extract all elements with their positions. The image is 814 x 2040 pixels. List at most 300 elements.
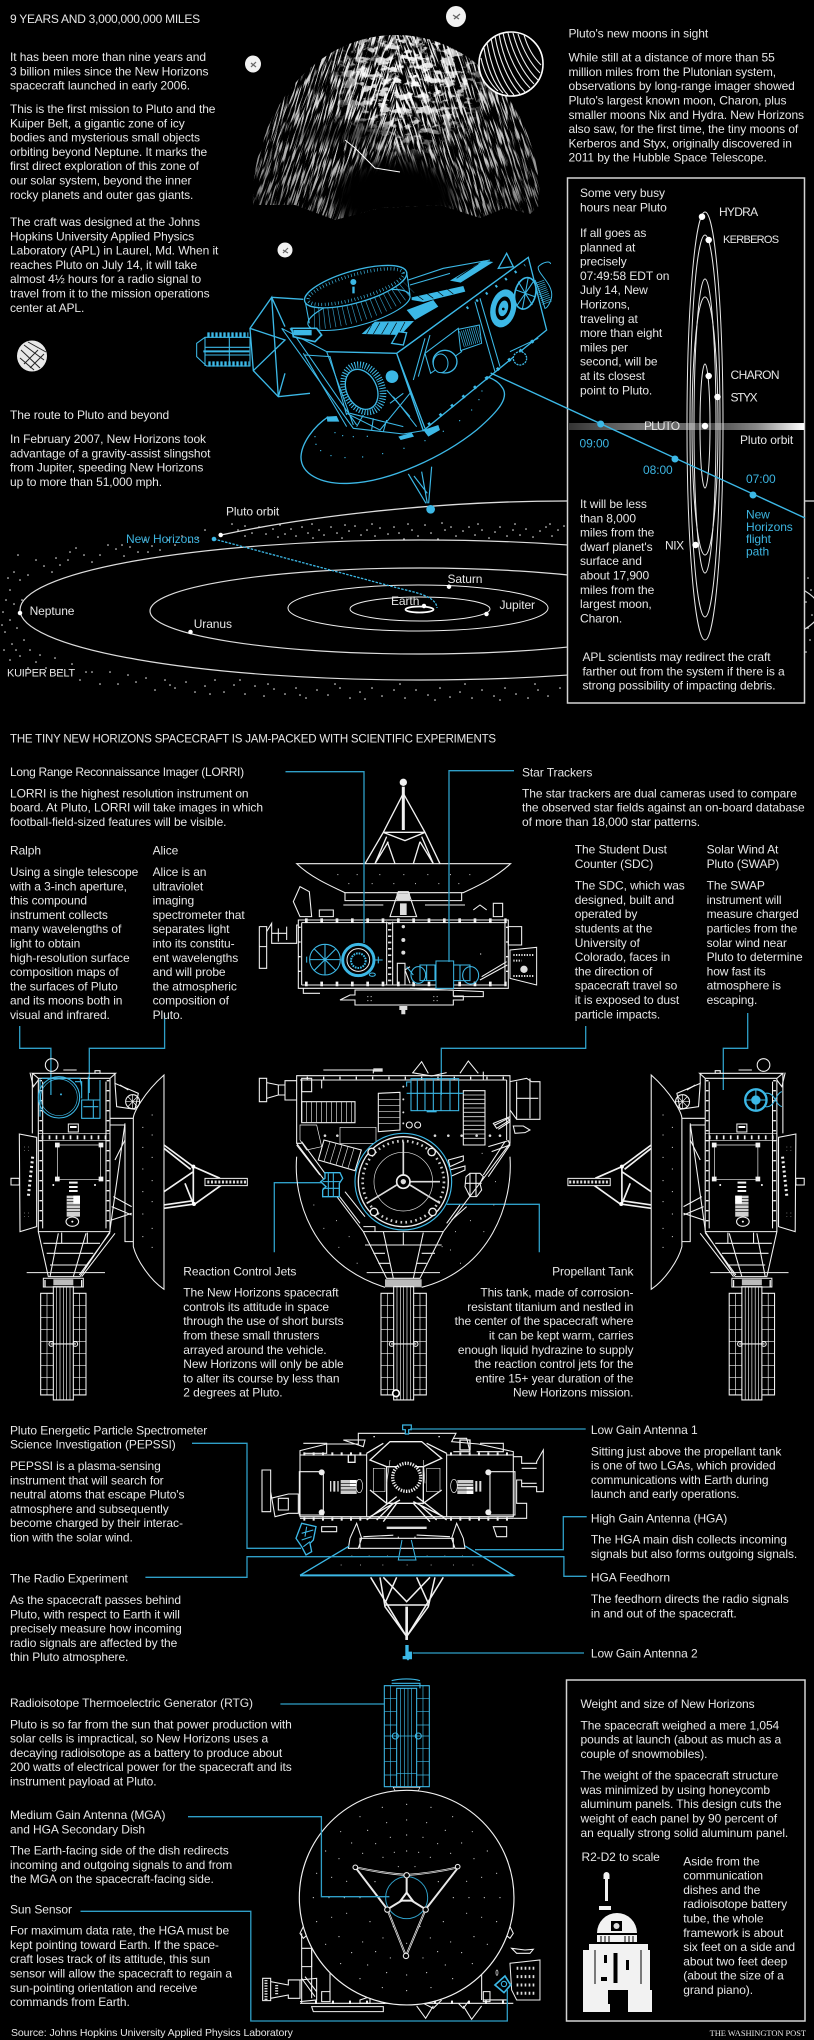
top ring (304, 281, 414, 339)
leaders: bottom view (80, 1704, 507, 2021)
panel: close flyby box: HYDRA (719, 205, 758, 219)
Pluto orbit band (568, 423, 804, 430)
text block: intro: 3 billion miles since the New Horizons (10, 64, 208, 78)
text block: LORRI: Long Range Reconnaissance Imager (LORRI) (10, 765, 244, 779)
panel: close flyby box: miles from the (580, 526, 655, 540)
text block: Star Trackers: of more than 18,000 star patterns. (522, 815, 700, 829)
panel: close flyby box: miles from the (580, 583, 655, 597)
text block: RTG: solar cells is impractical, so New Horizons uses a (10, 1732, 268, 1746)
flight path line (491, 373, 805, 518)
text block: intro: center at APL. (10, 301, 84, 315)
rear RTG (197, 337, 250, 366)
text block: Reaction Control Jets: New Horizons will only be able (183, 1357, 344, 1371)
panel: close flyby box: more than eight (580, 326, 663, 340)
text block: PEPSSI: become charged by their interac- (10, 1516, 183, 1530)
orbits (350, 597, 490, 621)
text block: route to Pluto: In February 2007, New Horizons took (10, 432, 207, 446)
text block: Ralph: Using a single telescope (10, 865, 139, 879)
panel: close flyby box: largest moon, (580, 597, 652, 611)
spacecraft: blue perspective view (197, 253, 552, 514)
panel: close flyby box: July 14, New (580, 283, 648, 297)
panel: close flyby box: 09:00 (580, 437, 610, 451)
text block: Propellant Tank: the reaction control jets for the (475, 1357, 634, 1371)
dish (299, 1790, 514, 2005)
text block: Ralph: instrument collects (10, 908, 108, 922)
left clutter (293, 887, 503, 917)
title: 9 YEARS AND 3,000,000,000 MILES (10, 12, 200, 26)
text block: Alice: composition of (153, 994, 230, 1008)
solar system diagram: KUIPER BELT (7, 668, 75, 680)
panel: close flyby box: at its closest (580, 369, 646, 383)
text block: Ralph: and its moons both in (10, 994, 122, 1008)
panel: weight and size: grand piano). (683, 1983, 753, 1997)
wheels on side (486, 287, 520, 330)
text block: Reaction Control Jets: 2 degrees at Pluto. (183, 1386, 283, 1400)
box text: Some very busy (580, 186, 665, 200)
panel: weight and size: an equally strong solid aluminum panel. (580, 1826, 788, 1840)
text block: Reaction Control Jets: from these small thrusters (183, 1328, 319, 1342)
text block: SWAP: solar wind near (707, 936, 787, 950)
text block: RTG: Pluto is so far from the sun that power production with (10, 1717, 292, 1731)
text block: SWAP: instrument will (707, 893, 781, 907)
text block: Alice: ent wavelengths (153, 951, 238, 965)
text block: Pluto's new moons: smaller moons Nix and Hydra. New Horizons (568, 108, 804, 122)
panel: close flyby box: strong possibility of impacting debris. (582, 679, 775, 693)
text block: SWAP: measure charged (707, 907, 799, 921)
text block: Reaction Control Jets: arrayed around the vehicle. (183, 1343, 327, 1357)
text block: Alice: imaging (153, 894, 194, 908)
text block: HGA Feedhorn: in and out of the spacecraft. (591, 1606, 737, 1620)
tube & cone (425, 328, 462, 373)
text block: Pluto's new moons: observations by long-range imager showed (568, 79, 795, 93)
spacecraft: top view (259, 779, 537, 1014)
panel: close flyby box: Pluto orbit (740, 433, 794, 447)
text block: MGA: and HGA Secondary Dish (10, 1822, 145, 1836)
text block: intro: bodies and mysterious small objects (10, 131, 200, 145)
dot row (325, 1132, 500, 1140)
text block: Propellant Tank: the center of the spacecraft where (455, 1314, 634, 1328)
text block: Star Trackers: Star Trackers (522, 765, 592, 779)
Ralph and Alice blue (38, 1077, 80, 1118)
text block: Low Gain Antenna 1: communications with Earth during (591, 1473, 768, 1487)
text block: Ralph: this compound (10, 894, 87, 908)
jets (321, 1173, 343, 1197)
solar system diagram (2, 501, 814, 700)
text block: intro: It has been more than nine years and (10, 50, 206, 64)
blue Ralph wheel (310, 944, 340, 975)
panel: weight and size: The weight of the spacecraft structure (580, 1769, 779, 1783)
text block: intro: spacecraft launched in early 2006. (10, 79, 190, 93)
text block: Reaction Control Jets: The New Horizons spacecraft (183, 1286, 339, 1300)
panel: close flyby box: planned at (580, 240, 636, 254)
text block: LORRI: LORRI is the highest resolution instrument on (10, 786, 249, 800)
text block: SDC: designed, built and (575, 893, 674, 907)
solar system diagram: Saturn (448, 572, 482, 586)
text block: PEPSSI: Pluto Energetic Particle Spectrometer (10, 1423, 207, 1437)
SWAP blue (745, 1089, 767, 1111)
text block: intro: Hopkins University Applied Physics (10, 229, 194, 243)
panel: close flyby box: Horizons (746, 520, 793, 534)
corner jet (513, 352, 527, 365)
panel: weight and size: R2-D2 to scale (582, 1850, 660, 1864)
text block: SDC: the direction of (575, 964, 653, 978)
text block: HGA Feedhorn: The feedhorn directs the radio signals (591, 1592, 789, 1606)
panel: close flyby box (491, 178, 805, 703)
text block: Low Gain Antenna 1: Low Gain Antenna 1 (591, 1423, 698, 1437)
panel: close flyby box: KERBEROS (723, 234, 779, 246)
small bracket (292, 328, 322, 342)
text block: Propellant Tank: resistant titanium and nestled in (467, 1300, 633, 1314)
spacecraft: right side view (568, 1059, 804, 1400)
panel: weight and size: aluminum panels. This design cuts the (580, 1797, 782, 1811)
solar system diagram: Uranus (194, 617, 232, 631)
PEPSSI (296, 1523, 316, 1555)
text block: MGA: the MGA on the spacecraft-facing side. (10, 1872, 214, 1886)
text block: HGA Feedhorn: HGA Feedhorn (591, 1570, 670, 1584)
HGA (300, 1546, 513, 1575)
text block: Alice: separates light (153, 922, 230, 936)
text block: Sun Sensor: kept pointing toward Earth. If the space- (10, 1938, 219, 1952)
Sun and Earth (406, 606, 434, 612)
striped panels (302, 1102, 355, 1123)
text block: Star Trackers: the observed star fields against an on-board database (522, 801, 805, 815)
text block: Pluto's new moons: million miles from the Plutonian system, (568, 65, 776, 79)
text block: MGA: Medium Gain Antenna (MGA) (10, 1808, 165, 1822)
moons: small (17, 6, 466, 372)
text block: Propellant Tank: New Horizons mission. (513, 1386, 633, 1400)
text block: SWAP: how fast its (707, 964, 766, 978)
text block: SWAP: The SWAP (707, 879, 765, 893)
panel: weight and size: weight of each panel by 90 percent of (580, 1812, 778, 1826)
panel: close flyby box: about 17,900 (580, 568, 650, 582)
dish mount (343, 892, 465, 917)
source credit: Source: Johns Hopkins University Applied Physics Laboratory (11, 2027, 294, 2039)
solar system diagram: Neptune (30, 604, 75, 618)
body (300, 1433, 513, 1518)
panel: weight and size: The spacecraft weighed a mere 1,054 (580, 1718, 780, 1732)
text block: PEPSSI: atmosphere and subsequently (10, 1502, 169, 1516)
text block: route to Pluto: from Jupiter, speeding New Horizons (10, 461, 203, 475)
panel: weight and size: couple of snowmobiles). (580, 1747, 707, 1761)
text block: PEPSSI: Science Investigation (PEPSSI) (10, 1438, 176, 1452)
text block: SDC: students at the (575, 922, 653, 936)
panel: weight and size: about two feet deep (683, 1954, 788, 1968)
dotted flight path (214, 539, 437, 608)
panel: weight and size: dishes and the (683, 1883, 761, 1897)
text block: Alice: the atmospheric (153, 979, 237, 993)
panel: weight and size: pounds at launch (about as much as a (580, 1733, 781, 1747)
text block: HGA: The HGA main dish collects incoming (591, 1533, 787, 1547)
panel: close flyby box: than 8,000 (580, 511, 636, 525)
panel: weight and size: tube, the whole (683, 1912, 764, 1926)
RTG blue (384, 1679, 429, 1787)
planet dots (20, 535, 486, 632)
text block: Pluto's new moons: 2011 by the Hubble Space Telescope. (568, 151, 767, 165)
text block: Star Trackers: The star trackers are dual cameras used to compare (522, 786, 797, 800)
panel: close flyby box: CHARON (730, 368, 780, 382)
text block: SDC: spacecraft travel so (575, 979, 678, 993)
text block: Alice: Alice (153, 844, 178, 858)
spacecraft: bottom view with dish (263, 1679, 540, 2019)
panel: weight and size: Weight and size of New Horizons (580, 1697, 755, 1711)
panel: close flyby box: It will be less (580, 497, 647, 511)
text block: PEPSSI: instrument that will search for (10, 1473, 164, 1487)
panel: close flyby box: PLUTO (644, 419, 680, 433)
text block: route to Pluto: up to more than 51,000 mph. (10, 475, 162, 489)
text block: Ralph: Ralph (10, 844, 41, 858)
blue panel (411, 1079, 459, 1111)
spacecraft: front view (262, 1425, 543, 1661)
text block: Reaction Control Jets: Reaction Control Jets (183, 1264, 296, 1278)
panel: close flyby box: dwarf planet's (580, 540, 653, 554)
text block: HGA: signals but also forms outgoing signals. (591, 1547, 797, 1561)
panel: close flyby box: Horizons, (580, 298, 630, 312)
text block: Reaction Control Jets: controls its attitude in space (183, 1300, 329, 1314)
text block: intro: Laboratory (APL) in Laurel, Md. When it (10, 244, 219, 258)
text block: intro: The craft was designed at the Johns (10, 215, 200, 229)
body frame (297, 1076, 510, 1232)
moons (696, 217, 718, 545)
text block: Ralph: composition maps of (10, 965, 119, 979)
truss (363, 1227, 443, 1278)
text block: Sun Sensor: Sun Sensor (10, 1903, 72, 1917)
spacecraft: left side view (11, 1059, 247, 1400)
spacecraft: centre view with tank (259, 1061, 540, 1400)
text block: Sun Sensor: For maximum data rate, the HGA must be (10, 1924, 229, 1938)
truss under port (347, 390, 417, 432)
text block: Radio Experiment: precisely measure how incoming (10, 1622, 182, 1636)
panel: weight and size (566, 1680, 805, 2021)
text block: Radio Experiment: radio signals are affected by the (10, 1636, 178, 1650)
MGA circle (386, 1877, 428, 1919)
text block: Low Gain Antenna 1: launch and early operations. (591, 1487, 739, 1501)
panel: close flyby box: path (746, 544, 769, 558)
text block: SWAP: particles from the (707, 922, 798, 936)
section heading: THE TINY NEW HORIZONS SPACECRAFT IS JAM-PACKED WITH SCIENTIFIC EXPERIMENTS (10, 734, 496, 746)
labels: Pluto orbit (226, 504, 280, 518)
text block: Pluto's new moons: Pluto's largest known moon, Charon, plus (568, 94, 786, 108)
text block: Pluto's new moons: Pluto's new moons in sight (568, 27, 708, 41)
panel: close flyby box: NIX (665, 539, 684, 553)
text block: Propellant Tank: it can be kept warm, carries (489, 1328, 633, 1342)
central frame (367, 1442, 447, 1522)
text block: LORRI: board. At Pluto, LORRI will take images in which (10, 801, 263, 815)
sun sensor (495, 1976, 511, 1993)
panel: close flyby box: If all goes as (580, 226, 646, 240)
rivets (428, 337, 538, 425)
text block: Reaction Control Jets: through the use of short bursts (183, 1314, 344, 1328)
text block: Reaction Control Jets: to alter its course by less than (183, 1371, 339, 1385)
right instrument (513, 1450, 543, 1518)
top panels (450, 261, 493, 283)
text block: intro: first direct exploration of this zone of (10, 159, 200, 173)
text block: intro: rocky planets and outer gas giants. (10, 188, 193, 202)
text block: SWAP: Solar Wind At (707, 843, 778, 857)
text block: Radio Experiment: As the spacecraft passes behind (10, 1593, 181, 1607)
text block: Ralph: high-resolution surface (10, 951, 130, 965)
text block: Sun Sensor: sensor will allow the spacecraft to regain a (10, 1966, 232, 1980)
secondary tripod (355, 1867, 458, 1956)
panel: close flyby box: second, will be (580, 355, 658, 369)
text block: intro: almost 4½ hours for a radio signal to (10, 272, 202, 286)
text block: SDC: operated by (575, 907, 637, 921)
front port (336, 358, 391, 419)
triangles (412, 1061, 478, 1076)
text block: SDC: it is exposed to dust (575, 993, 680, 1007)
feed (408, 467, 432, 503)
text block: intro: reaches Pluto on July 14, it will take (10, 258, 197, 272)
panel: close flyby box: traveling at (580, 312, 638, 326)
text block: SDC: University of (575, 936, 641, 950)
icon: R2-D2 silhouette (583, 1872, 652, 2012)
panel: close flyby box: 08:00 (643, 463, 673, 477)
dish dots (313, 1804, 500, 1991)
text block: Propellant Tank: This tank, made of corrosion- (480, 1286, 633, 1300)
text block: Radio Experiment: The Radio Experiment (10, 1572, 128, 1586)
text block: RTG: 200 watts of electrical power for the spacecraft and its (10, 1760, 292, 1774)
panel: close flyby box: farther out from the system if there is a (582, 664, 785, 678)
solar system diagram: Jupiter (500, 598, 535, 612)
text block: Propellant Tank: entire 15+ year duration of the (475, 1371, 634, 1385)
panel: weight and size: framework is about (683, 1926, 784, 1940)
panel: close flyby box: 07:00 (746, 472, 776, 486)
text block: LORRI: football-field-sized features will be visible. (10, 815, 226, 829)
text block: Ralph: the surfaces of Pluto (10, 979, 118, 993)
text block: Sun Sensor: sun-pointing orientation and receive (10, 1981, 198, 1995)
RTG stripes (341, 1480, 357, 1494)
text block: SDC: The SDC, which was (575, 879, 685, 893)
illustration: Pluto (252, 35, 540, 220)
text block: SDC: Counter (SDC) (575, 857, 653, 871)
solar system diagram: Earth (391, 594, 419, 608)
body faces (327, 257, 547, 431)
text block: Low Gain Antenna 1: Sitting just above the propellant tank (591, 1444, 782, 1458)
lower clutter (322, 1523, 507, 1548)
text block: SDC: particle impacts. (575, 1007, 660, 1021)
text block: SWAP: escaping. (707, 993, 757, 1007)
text block: Alice: into its constitu- (153, 936, 235, 950)
text block: intro: travel from it to the mission operations (10, 286, 210, 300)
text block: Sun Sensor: craft loses track of its attitude, this sun (10, 1952, 210, 1966)
panel: weight and size: radioisotope battery (683, 1897, 787, 1911)
text block: SWAP: Pluto to determine (707, 950, 803, 964)
text block: Ralph: many wavelengths of (10, 922, 122, 936)
text block: Alice: and will probe (153, 965, 226, 979)
blue star trackers (411, 967, 426, 983)
box text: hours near Pluto (580, 200, 667, 214)
text block: Ralph: visual and infrared. (10, 1008, 110, 1022)
text block: Propellant Tank: enough liquid hydrazine to supply (458, 1343, 633, 1357)
moon: large (479, 32, 543, 96)
text block: Radio Experiment: Pluto, with respect to Earth it will (10, 1607, 180, 1621)
text block: route to Pluto: The route to Pluto and beyond (10, 408, 169, 422)
text block: route to Pluto: advantage of a gravity-assist slingshot (10, 446, 211, 460)
dish (296, 1157, 510, 1287)
text block: PEPSSI: PEPSSI is a plasma-sensing (10, 1459, 161, 1473)
text block: RTG: instrument payload at Pluto. (10, 1774, 157, 1788)
text block: Low Gain Antenna 1: is one of two LGAs, which provided (591, 1459, 776, 1473)
tank (355, 1133, 452, 1230)
left instrument (262, 1470, 298, 1517)
publisher credit: THE WASHINGTON POST (710, 2028, 807, 2038)
leaders: front view (145, 1429, 587, 1653)
text: Low Gain Antenna 2: Low Gain Antenna 2 (591, 1646, 698, 1660)
panel: weight and size: six feet on a side and (683, 1940, 795, 1954)
left hex cone (250, 297, 310, 397)
struts (297, 1142, 510, 1223)
panel: close flyby box: New (746, 508, 770, 522)
blue LORRI (343, 944, 374, 976)
text block: SDC: Colorado, faces in (575, 950, 670, 964)
text block: Alice: spectrometer that (153, 908, 245, 922)
text block: Pluto's new moons: Kerberos and Styx, originally discovered in (568, 136, 792, 150)
text block: intro: Kuiper Belt, a gigantic zone of icy (10, 116, 185, 130)
text block: MGA: The Earth-facing side of the dish redirects (10, 1844, 229, 1858)
text block: Radio Experiment: thin Pluto atmosphere. (10, 1650, 128, 1664)
text block: Alice: Alice is an (153, 865, 206, 879)
text block: Alice: Pluto. (153, 1008, 183, 1022)
solar system diagram: New Horizons (126, 532, 200, 546)
panel: close flyby box: precisely (580, 255, 627, 269)
text block: RTG: decaying radioisotope as a battery to produce about (10, 1746, 283, 1760)
text block: intro: our solar system, beyond the inner (10, 174, 191, 188)
text block: SDC: The Student Dust (575, 843, 667, 857)
lower tripod (371, 1577, 443, 1637)
text block: PEPSSI: tion with the solar wind. (10, 1530, 133, 1544)
panel: close flyby box: APL scientists may redirect the craft (582, 650, 770, 664)
body (298, 920, 508, 988)
text block: Sun Sensor: commands from Earth. (10, 1995, 130, 2009)
LGA (403, 1425, 411, 1434)
panel: weight and size: (about the size of a (683, 1969, 784, 1983)
panel: close flyby box: flight (746, 532, 772, 546)
panel: weight and size: Aside from the (683, 1854, 760, 1868)
antenna tripod (365, 793, 440, 864)
text block: MGA: incoming and outgoing signals to and from (10, 1858, 232, 1872)
base body (300, 1933, 513, 2019)
text block: PEPSSI: neutral atoms that escape Pluto's (10, 1488, 184, 1502)
text block: SWAP: Pluto (SWAP) (707, 857, 779, 871)
text block: Propellant Tank: Propellant Tank (552, 1264, 633, 1278)
text block: intro: This is the first mission to Pluto and the (10, 102, 216, 116)
dish (297, 864, 511, 893)
panel: close flyby box: point to Pluto. (580, 383, 652, 397)
text block: RTG: Radioisotope Thermoelectric Generator (RTG) (10, 1696, 253, 1710)
text block: Alice: ultraviolet (153, 879, 204, 893)
Kuiper belt dots (2, 523, 812, 700)
text block: intro: orbiting beyond Neptune. It marks the (10, 145, 208, 159)
panel: close flyby box: Charon. (580, 611, 622, 625)
right instrument (510, 1078, 540, 1119)
panel: close flyby box: STYX (730, 391, 758, 405)
top clutter (303, 1437, 503, 1453)
text block: SWAP: atmosphere is (707, 979, 781, 993)
panel: close flyby box: surface and (580, 554, 642, 568)
leaders: top view and middle views (20, 771, 748, 1252)
text block: HGA: High Gain Antenna (HGA) (591, 1511, 727, 1525)
panel: close flyby box: miles per (580, 340, 628, 354)
left instrument (259, 1078, 312, 1102)
text block: Ralph: with a 3-inch aperture, (9, 879, 127, 893)
panel: weight and size: was minimized by using honeycomb (580, 1783, 770, 1797)
bottom assembly (303, 988, 483, 1005)
panel: close flyby box: 07:49:58 EDT on (580, 269, 669, 283)
left instrument (259, 923, 298, 968)
moon orbits (687, 212, 723, 640)
text block: Pluto's new moons: While still at a distance of more than 55 (568, 51, 775, 65)
text block: Pluto's new moons: also saw, for the first time, the tiny moons of (568, 122, 799, 136)
right instruments (480, 927, 522, 980)
